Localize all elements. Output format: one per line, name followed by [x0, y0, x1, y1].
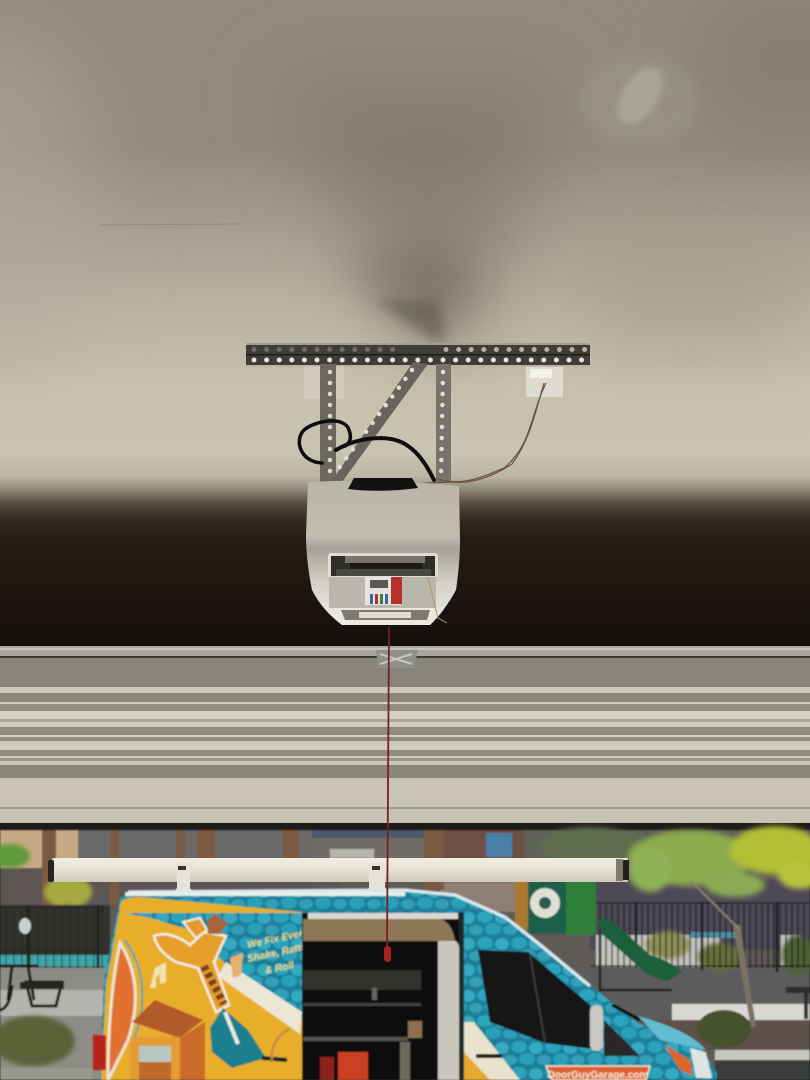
bench right	[786, 987, 810, 1019]
right pavement	[560, 965, 810, 1080]
twisted sensor wire	[408, 383, 546, 484]
slogan on van	[246, 927, 310, 977]
opener motor unit	[306, 478, 460, 625]
slogan on van: & Roll	[264, 960, 295, 977]
track bracket	[376, 650, 418, 668]
van roof rack	[48, 858, 629, 896]
red emergency release cord	[384, 627, 391, 962]
warning labels	[365, 577, 402, 605]
music notes	[150, 953, 243, 988]
green shrubs behind fence	[646, 931, 810, 975]
door frame	[459, 912, 464, 1080]
teal upper corner	[124, 913, 302, 1018]
outside background: buildings, trees, pool, fence	[0, 826, 810, 1080]
tree trunk	[733, 925, 756, 1028]
slogan on van: Shake, Rattle	[246, 941, 310, 965]
white swoosh	[218, 962, 302, 1034]
wing mirror	[590, 1005, 603, 1051]
giraffe head and neck	[154, 914, 229, 1012]
horizontal perforated angle bracket	[246, 343, 590, 366]
birdhouse	[130, 1000, 205, 1080]
giraffe graphic panel	[101, 897, 310, 1080]
opener lower panel	[329, 577, 436, 608]
left bush	[0, 1016, 75, 1066]
wiper	[612, 1005, 640, 1020]
playground	[515, 880, 682, 990]
green slide	[598, 919, 682, 981]
buildings	[0, 830, 810, 950]
cable connector box	[348, 478, 418, 491]
slogan on van: We Fix Every	[246, 927, 310, 951]
left shrubs	[0, 844, 92, 965]
pool and paving left	[0, 905, 110, 955]
van body	[100, 890, 717, 1080]
pool beyond fence	[596, 935, 721, 967]
cab window	[478, 950, 640, 1056]
right fence	[590, 902, 810, 972]
palm trunks	[42, 830, 444, 905]
right tree foliage	[542, 826, 810, 897]
opener light lens	[336, 608, 434, 625]
giraffe jacket	[210, 1008, 266, 1068]
opener rail window	[328, 553, 438, 578]
open side door, van interior	[302, 913, 460, 1080]
orange circle swirl	[108, 943, 135, 1080]
vertical and diagonal struts	[320, 362, 451, 482]
black power cable	[299, 421, 434, 480]
headlight	[690, 1048, 712, 1078]
ceiling mounting pads	[304, 366, 563, 399]
picnic table	[0, 966, 62, 1010]
left fence	[0, 905, 105, 968]
garage ceiling	[0, 0, 810, 648]
cab lower panel colour	[464, 1022, 520, 1080]
van web address plate	[546, 1066, 650, 1080]
red tail light	[93, 1035, 106, 1070]
delivery van	[93, 890, 717, 1080]
hood highlight	[638, 1016, 706, 1050]
right bush	[697, 1010, 751, 1048]
door track and folded door panels	[0, 646, 810, 830]
